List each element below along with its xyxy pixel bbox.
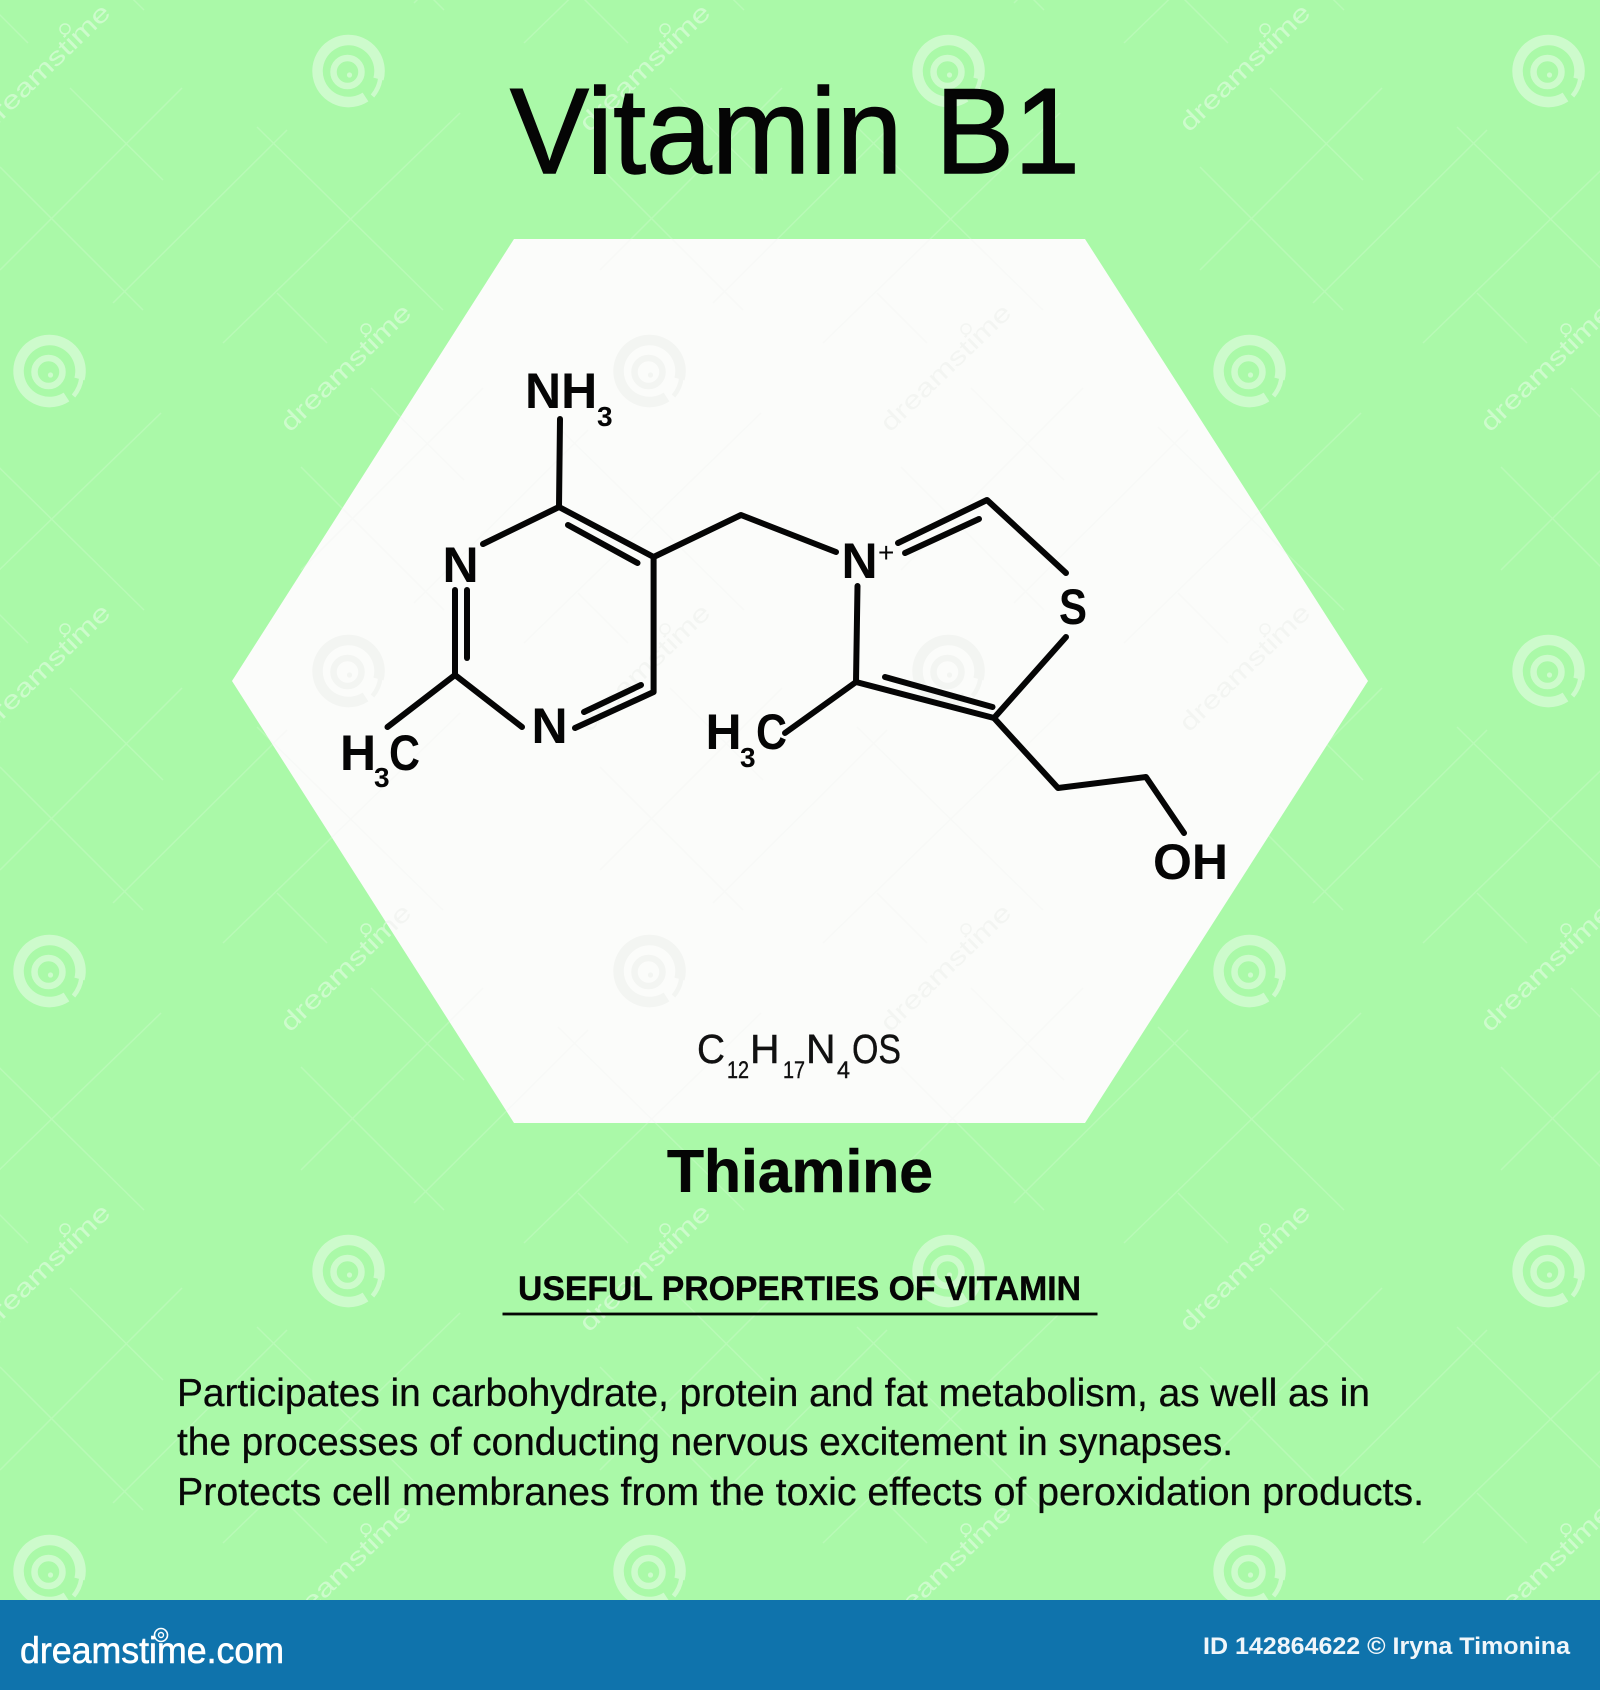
- molecular formula: OS: [852, 1026, 901, 1072]
- atom labels: N: [442, 537, 479, 593]
- molecular formula: 4: [837, 1057, 850, 1084]
- atom labels: NH: [525, 363, 597, 419]
- compound name: Thiamine: [667, 1138, 933, 1205]
- molecular formula: N: [806, 1026, 836, 1072]
- image id and credit: ID 142864622 © Iryna Timonina: [1203, 1633, 1570, 1660]
- molecular formula: H: [750, 1026, 780, 1072]
- atom labels: OH: [1153, 834, 1228, 890]
- chemical structure: thiamine molecule: [340, 363, 1228, 890]
- body text: Participates in carbohydrate, protein and fat metabolism, as well as in: [177, 1372, 1370, 1415]
- body text: Protects cell membranes from the toxic effects of peroxidation products.: [177, 1471, 1424, 1514]
- atom labels: H: [340, 725, 376, 781]
- hexagon watermark: [0, 0, 1600, 1243]
- body text: [177, 1372, 1424, 1514]
- atom labels: H: [706, 704, 742, 760]
- atom labels: 3: [374, 762, 390, 793]
- atom labels: N: [532, 698, 568, 754]
- molecular formula: 17: [783, 1057, 805, 1084]
- molecular formula: 12: [727, 1057, 749, 1084]
- atom labels: 3: [597, 401, 613, 432]
- molecular formula: C: [697, 1026, 725, 1072]
- atom labels: +: [878, 537, 894, 568]
- atom labels: N: [842, 533, 878, 589]
- body text: the processes of conducting nervous excitement in synapses.: [177, 1421, 1233, 1464]
- atom labels: S: [1059, 579, 1087, 635]
- panel: hexagon: [232, 239, 1368, 1123]
- title: Vitamin B1: [510, 63, 1080, 199]
- footer bar: [0, 1600, 1600, 1690]
- molecule bonds: [388, 419, 1184, 833]
- molecular formula: [697, 1026, 901, 1084]
- atom labels: C: [389, 725, 420, 781]
- atom labels: C: [756, 704, 787, 760]
- section heading: USEFUL PROPERTIES OF VITAMIN: [518, 1270, 1081, 1308]
- footer logo: dreamstime.com: [20, 1630, 284, 1671]
- atom labels: 3: [740, 742, 756, 773]
- atom labels: [340, 363, 1228, 890]
